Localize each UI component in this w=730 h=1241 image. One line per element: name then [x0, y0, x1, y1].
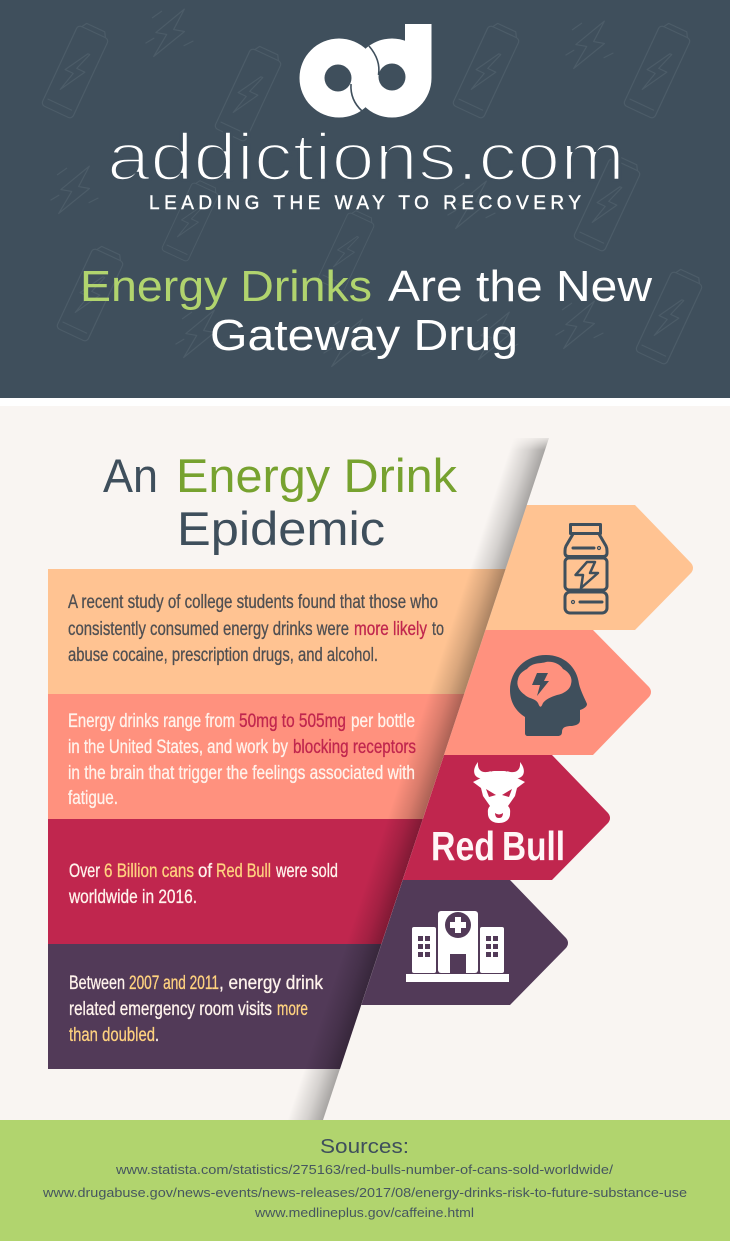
text block: emergency visits: , energy drink [219, 972, 323, 994]
panel: salmon band [48, 694, 464, 819]
logo tagline: LEADING THE WAY TO RECOVERY [149, 193, 581, 214]
text block: dosage: 50mg to 505mg [239, 710, 346, 732]
brain [517, 662, 572, 707]
heading [103, 449, 458, 555]
logo text: Red Bull [431, 823, 565, 869]
sources heading: Sources: [320, 1136, 409, 1158]
heading: An [103, 449, 158, 502]
text block: Red Bull sales: 6 Billion cans [104, 860, 194, 882]
text block: dosage: fatigue. [68, 787, 118, 809]
title: Energy Drinks [80, 262, 372, 311]
text block: dosage: Energy drinks range from [68, 710, 235, 732]
title [80, 262, 652, 360]
text block: emergency visits: . [155, 1024, 159, 1046]
text block: dosage: in the brain that trigger the feelings associated with [68, 762, 415, 784]
text block: Red Bull sales: were sold [275, 860, 338, 882]
logo mark [300, 24, 432, 118]
arrow: orange [485, 505, 693, 630]
fold shadow [287, 434, 552, 1120]
source links [42, 1162, 687, 1220]
text block: dosage [68, 710, 416, 809]
bolt [532, 673, 549, 696]
icon: bottle [565, 524, 607, 613]
icon: bull [473, 762, 525, 823]
text block: emergency visits: Between [69, 972, 125, 994]
text block: emergency visits: than doubled [69, 1024, 155, 1046]
icon: hospital [406, 911, 509, 982]
logo wordmark: addictions.com [107, 120, 625, 195]
text block: Red Bull sales: Red Bull [216, 860, 271, 882]
panel: sources footer [0, 1120, 730, 1241]
icon: head with brain [510, 655, 587, 736]
heading: Epidemic [177, 502, 385, 555]
heading: Energy Drink [176, 449, 458, 502]
text block: study: abuse cocaine, prescription drugs, and alcohol. [68, 644, 378, 666]
logo text: Red Bull: Red [431, 823, 495, 869]
text block: emergency visits: 2007 and 2011 [129, 972, 219, 994]
text block: Red Bull sales [68, 860, 338, 908]
text block: study [68, 591, 444, 666]
panel: crimson band [48, 819, 423, 944]
title: Are the New [388, 262, 652, 311]
text block: Red Bull sales: of [198, 860, 212, 882]
panel: header [0, 0, 730, 406]
source links: www.drugabuse.gov/news-events/news-releases/2017/08/energy-drinks-risk-to-future-substance-use [42, 1185, 687, 1200]
text block: dosage: in the United States, and work by [68, 736, 288, 758]
text block: study: A recent study of college students found that those who [68, 591, 438, 613]
text block: dosage: blocking receptors [293, 736, 416, 758]
text block: emergency visits [69, 972, 323, 1046]
source links: www.medlineplus.gov/caffeine.html [254, 1205, 474, 1220]
text block: study: to [432, 618, 444, 640]
text block: study: more likely [354, 618, 427, 640]
arrow: salmon [444, 630, 651, 755]
text block: Red Bull sales: Over [69, 860, 100, 882]
arrow: purple [361, 880, 568, 1005]
source links: www.statista.com/statistics/275163/red-bulls-number-of-cans-sold-worldwide/ [115, 1162, 613, 1177]
text block: emergency visits: more [277, 998, 308, 1020]
title: Gateway Drug [210, 311, 518, 360]
text block: dosage: per bottle [351, 710, 415, 732]
logo text: Red Bull: Bull [502, 823, 565, 869]
arrow: crimson [403, 755, 610, 880]
panel: orange band [48, 569, 506, 694]
text block: emergency visits: related emergency room visits [69, 998, 272, 1020]
text block: Red Bull sales: worldwide in 2016. [68, 886, 197, 908]
background pattern: cans and bolts [41, 4, 705, 373]
panel: purple band [48, 944, 381, 1069]
text block: study: consistently consumed energy drinks were [68, 618, 349, 640]
